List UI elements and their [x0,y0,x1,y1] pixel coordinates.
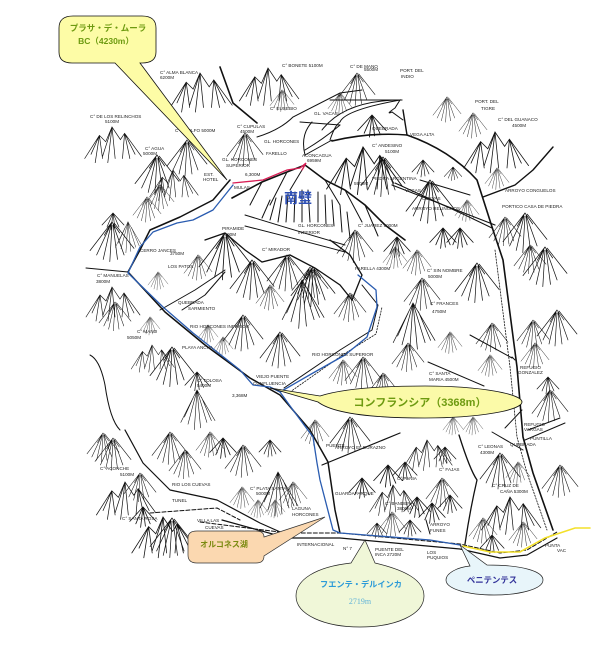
callout: Penitentes [446,545,543,595]
map place labels: CUEVAS [422,196,441,201]
map place labels: ARROYO RELINCHOS [412,206,460,211]
route: yellow road to Punta de Vacas [463,528,590,552]
map place labels: GL. VACAS [314,111,338,116]
map place labels: N° 7 [343,546,352,551]
map place labels: C° SIN NOMBRE [427,268,463,273]
route: blue trekking route [128,185,460,545]
callout: Plaza de Mulas: BC（4230m） [78,36,134,46]
map place labels: C° DEL GUANACO [498,117,538,122]
callout: Horcones lake [188,517,325,563]
map place labels: 4500M [512,123,526,128]
map place labels: C° ACONCHE [100,466,129,471]
map place labels: QUEBRADA [510,442,537,447]
map place labels: 5100M [120,472,134,477]
map place labels: PUQUIOS [427,555,448,560]
map place labels: TIGRE [481,106,495,111]
label: south face kanji: 南壁 [284,190,312,206]
map place labels: GL. HORCONES [298,223,333,228]
map place labels: VIEJO PUENTE [256,374,289,379]
callout: Puente del Inca: フエンテ・デルインカ [320,579,402,589]
map place labels: 6959M [307,158,321,163]
map place labels: CERRO JANCES [140,248,176,253]
map place labels: FUNES [430,528,446,533]
map place labels: 6,300M [245,172,260,177]
map place labels: GL. HORCONES [264,139,299,144]
map place labels: RIO HORCONES SUPERIOR [312,352,374,357]
map place labels: 3800M [397,506,411,511]
map place labels: 5500M [364,67,378,72]
map place labels: ARROYO EL DURAZNO [335,445,386,450]
map place labels: VARGAS [524,427,543,432]
callout: Puente del Inca [296,540,424,627]
map place labels: 3,368M [232,393,247,398]
map place labels: PIEDRA ARGENTINA [372,176,418,181]
map place labels: CUEVAS [205,525,224,530]
map place labels: C° DE MANO [350,64,378,69]
map: hand-drawn mountains [85,68,578,558]
map place labels: FARELLA 4300M [355,266,390,271]
map place labels: 3800M [96,279,110,284]
callout: Penitentes: ペニテンテス [467,575,517,585]
map place labels: SUPERIOR [226,163,251,168]
map place labels: RUTA [273,539,286,544]
map place labels: C° FRANCES [430,301,458,306]
map: central massif ridge [86,67,565,450]
map place labels: 5900M [354,181,368,186]
map place labels: TUNEL [172,498,188,503]
callout: Plaza de Mulas [59,16,227,180]
map place labels: 3750M [170,251,184,256]
map place labels: VEGA ALTA [410,132,435,137]
map place labels: INCA 2720M [375,552,401,557]
map place labels: HORCONES [292,512,319,517]
map place labels: VEGAS [405,188,421,193]
map place labels: C° BANDERA [385,501,415,506]
map place labels: CAÑA 5300M [500,488,528,494]
route: red summit route [233,163,306,183]
map place labels: C° ANDESINO [372,143,403,148]
callout: Confluencia [270,386,522,418]
map place labels: GL. HORCONES [222,157,257,162]
map place labels: C° SANTA [429,371,451,376]
map place labels: PORT. DEL [475,99,499,104]
map place labels: C° MIRADOR [262,247,291,252]
map place labels: PUNTILLA [530,436,553,441]
map place labels: INFERIOR [298,230,321,235]
road: rivers and highways [125,134,557,558]
map place labels: 5050M [127,335,141,340]
callout: Puente del Inca: 2719m [349,597,372,606]
map place labels: PORT. DEL [400,68,424,73]
map place labels: INTERNACIONAL [297,542,335,547]
map place labels: PUENTE [326,443,345,448]
callout: Confluencia: コンフランシア（3368m） [354,396,486,409]
map place labels: ACONCAGUA [302,153,333,158]
map place labels: C° AGUA [145,146,165,151]
map place labels: VILLA LAS [197,518,219,523]
map place labels: 4300M [480,450,494,455]
map place labels: 5100M [105,119,119,124]
map place labels: 5000M [428,274,442,279]
map place labels: 5400M [197,383,211,388]
callout: Plaza de Mulas: プラサ・デ・ムーラ [70,23,146,33]
map place labels: PLAYA ANCHA [182,345,214,350]
map place labels: QUEBRADA [372,126,399,131]
map place labels: PORTICO CASA DE PIEDRA [502,204,563,209]
map place labels: 4500M [240,129,254,134]
map place labels: C° PANIA [397,476,418,481]
map place labels: C° MANUELAS [97,273,129,278]
map place labels: C° ADOLFO 5000M [175,128,216,133]
map place labels: ARROYO CONGUELOS [505,188,556,193]
map place labels: 5100M [385,149,399,154]
map place labels: 5000M [256,491,270,496]
map place labels: MULAS [234,185,250,190]
map place labels: REFUGIO [520,365,541,370]
map place labels: LOS [427,550,436,555]
map place labels: 5000M [143,151,157,156]
map place labels: PUNTA [545,543,561,548]
map place labels: HOTEL [203,177,219,182]
callout: Horcones lake: オルコネス湖 [200,539,248,549]
map place labels: C° ALMA BLANCA [160,70,199,75]
map place labels: C° DE LOS RELINCHOS [90,114,141,119]
map place labels: SARMIENTO [188,306,216,311]
map place labels: GONZALEZ [518,370,543,375]
map place labels: 6000M [222,232,236,237]
map place labels: QUEBRADA [178,300,205,305]
map place labels: ARROYO [430,522,450,527]
map place labels: C° SANTA ROSA [122,516,158,521]
map place labels: EST. [204,172,214,177]
map place labels: RIO LOS CUEVAS [172,482,210,487]
map place labels: LOS PATOS [168,264,193,269]
map place labels: C° CRUZ DE [492,483,519,488]
map place labels: MARIA 4500M [429,377,459,382]
map place labels: C° MANO [137,329,158,334]
map place labels: VAC [557,548,567,553]
map place labels: C° EUSEBIO [270,106,297,111]
map place labels: FARELLO [266,151,287,156]
map place labels: PUENTE DEL [375,547,404,552]
map place labels: 6200M [160,75,174,80]
map place labels: CONFLUENCIA [253,381,287,386]
map place labels: 4750M [432,309,446,314]
map place labels: C° PLATA SANTA [250,486,287,491]
map place labels: C° CUPULAS [237,124,265,129]
map place labels: GUARDAPARQUE [335,491,374,496]
map place labels: PIRAMIDE [222,226,244,231]
map place labels: C° FAJAS [439,467,459,472]
map place labels: REFUGIO [524,422,545,427]
map place labels: LAGUNA [292,506,312,511]
map place labels: INDIO [401,74,414,79]
map place labels: RIO HORCONES INFERIOR [190,324,250,329]
map place labels: C° LEONAS [478,444,503,449]
map place labels: C° BONETE 5100M [282,63,323,68]
map place labels: C° TOLOSA [197,378,223,383]
map place labels: C° JUAREZ 5000M [358,223,398,228]
map place labels [90,63,567,560]
